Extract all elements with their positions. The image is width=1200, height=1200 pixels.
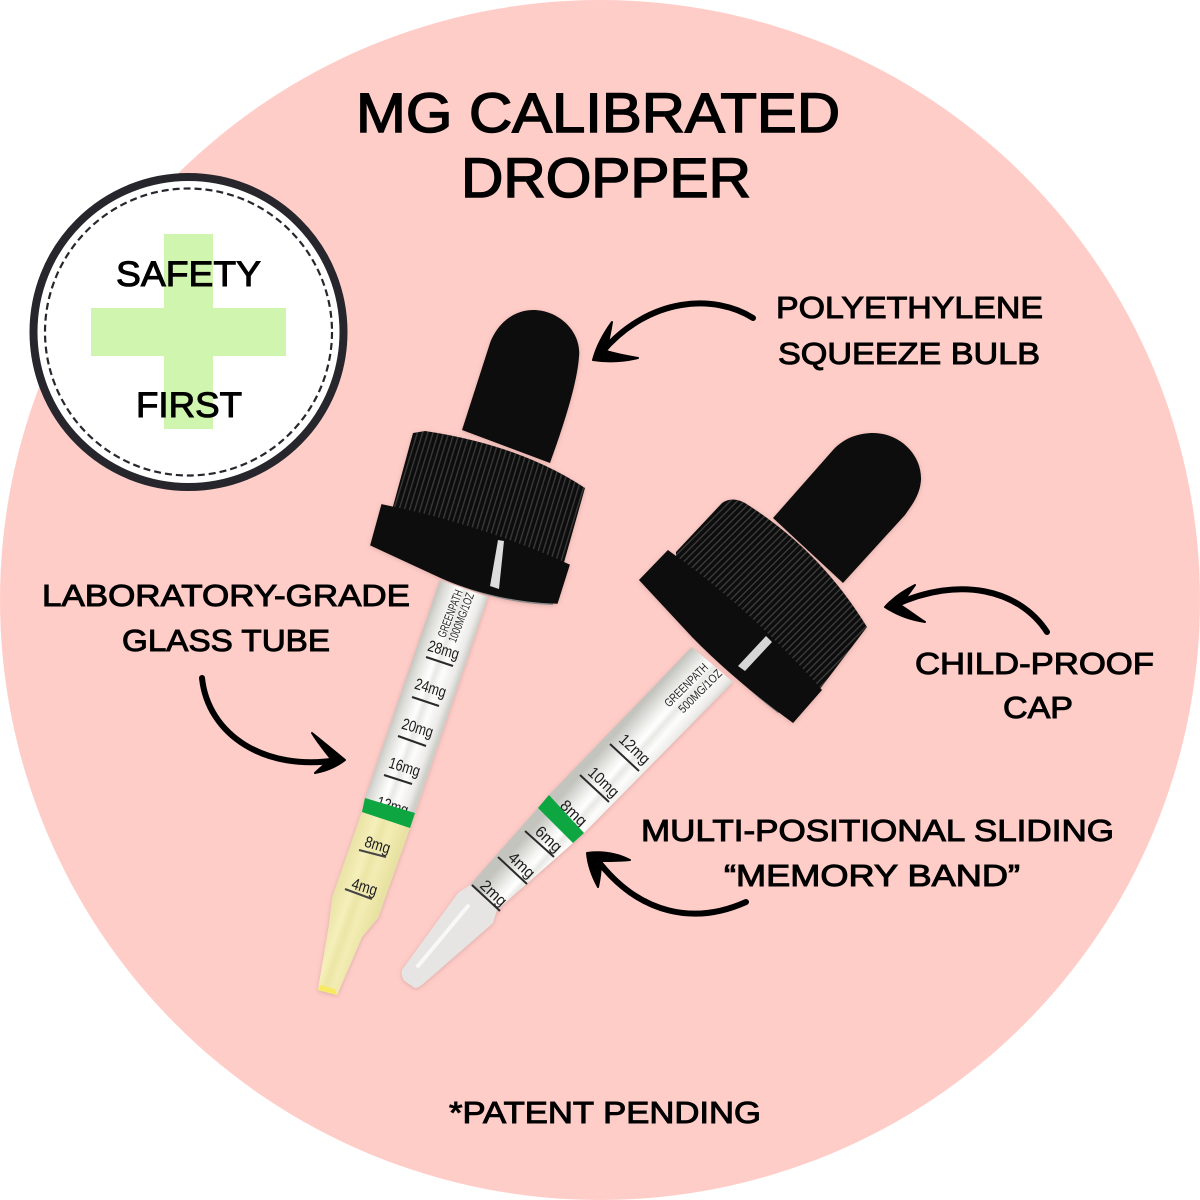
badge text: first: FIRST — [136, 386, 242, 425]
tube label: GREENPATH — [661, 660, 711, 710]
liquid marks: 4mg — [349, 876, 379, 900]
graduation marks: 28mg — [426, 638, 461, 664]
graduation marks — [472, 731, 653, 911]
callout: laboratory-grade glass tube: LABORATORY-GRADE — [42, 578, 410, 613]
callout: child-proof cap: CAP — [1003, 690, 1073, 725]
liquid tip edge — [318, 985, 337, 995]
right dropper, 500mg — [402, 433, 921, 988]
safety first badge — [34, 177, 344, 487]
graduation marks: 12mg — [615, 731, 653, 768]
knurled cap — [676, 500, 867, 689]
patent pending note: *PATENT PENDING — [449, 1095, 761, 1130]
badge text: safety: SAFETY — [116, 255, 261, 294]
collar underside — [445, 570, 553, 605]
cap collar — [640, 551, 821, 722]
callout: polyethylene squeeze bulb: SQUEEZE BULB — [778, 336, 1040, 371]
squeeze bulb — [462, 310, 579, 463]
tip highlight — [418, 906, 468, 966]
callout: memory band — [641, 813, 1114, 893]
graduation marks: 6mg — [531, 823, 565, 856]
arrow to memory band — [587, 852, 746, 914]
glass tube — [318, 580, 488, 995]
left dropper, 1000mg — [318, 310, 585, 995]
graduation marks — [375, 638, 461, 820]
graduation marks: 2mg — [476, 877, 510, 910]
tube label: GREENPATH — [435, 588, 466, 639]
graduation marks: 12mg — [375, 794, 410, 820]
squeeze bulb — [773, 433, 921, 583]
callout: memory band: “MEMORY BAND” — [724, 858, 1020, 893]
cap collar — [371, 505, 569, 603]
graduation marks: 10mg — [584, 764, 622, 801]
graduation marks: 8mg — [556, 797, 590, 830]
graduation marks: 20mg — [400, 716, 435, 742]
knurled cap — [392, 431, 585, 566]
callout: child-proof cap — [915, 646, 1154, 725]
callout: laboratory-grade glass tube — [42, 578, 410, 658]
collar highlight — [738, 636, 772, 671]
title — [356, 81, 840, 209]
memory band — [362, 798, 415, 828]
graduation marks: 4mg — [504, 849, 538, 882]
arrow to glass tube — [202, 678, 345, 773]
glass tube — [470, 647, 733, 910]
callout: laboratory-grade glass tube: GLASS TUBE — [122, 623, 330, 658]
tube label — [435, 588, 477, 644]
title: DROPPER — [461, 146, 751, 209]
arrow to bulb — [593, 303, 753, 361]
graduation marks: 24mg — [413, 676, 448, 702]
callout: child-proof cap: CHILD-PROOF — [915, 646, 1154, 681]
collar highlight — [490, 540, 504, 589]
liquid marks: 8mg — [362, 834, 392, 858]
tube label: 500MG/1OZ — [675, 666, 725, 716]
title: MG CALIBRATED — [356, 81, 840, 144]
collar underside — [700, 635, 785, 713]
memory band — [538, 795, 584, 843]
graduation marks: 16mg — [387, 755, 422, 781]
yellow liquid — [318, 812, 410, 995]
liquid marks — [345, 834, 392, 900]
callout: polyethylene squeeze bulb — [776, 290, 1043, 371]
clear tip — [402, 885, 497, 988]
tube label: 1000MG/1OZ — [445, 591, 477, 644]
callout: polyethylene squeeze bulb: POLYETHYLENE — [776, 290, 1043, 325]
callout: memory band: MULTI-POSITIONAL SLIDING — [641, 813, 1114, 848]
icon: green cross — [91, 234, 286, 429]
arrow to cap — [885, 585, 1047, 632]
